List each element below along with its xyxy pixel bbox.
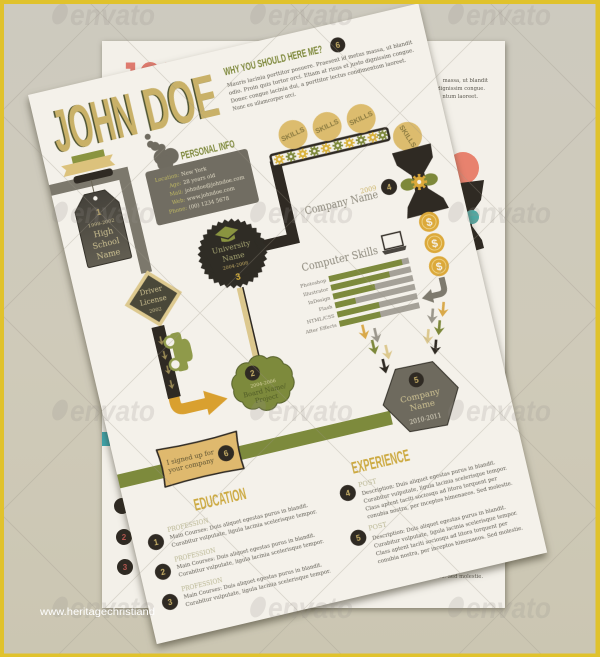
personal info details: New York: [181, 166, 208, 178]
education item 1: Main Courses: Duis aliquet egestas purus in blandit.: [169, 503, 309, 541]
diamond: driver license: License: [139, 294, 167, 308]
skill circles: SKILLS: [397, 124, 417, 149]
watermarks: envato: [70, 197, 155, 230]
small arrows: right stack: [415, 300, 459, 357]
back page number circles: 2: [122, 533, 127, 542]
grey pipe: [50, 173, 147, 290]
title: John Doe: JOHN: [46, 81, 143, 165]
back page footer text: himenaeos. Sed molestie.: [416, 574, 483, 580]
starburst: university: 2004-2008: [222, 260, 249, 272]
cloud: board name: Project: [254, 392, 279, 405]
orange arrow: [174, 386, 230, 422]
hexagon: company name: Company: [399, 387, 441, 406]
watermarks: envato: [268, 592, 353, 625]
coins: $: [430, 238, 439, 251]
starburst: university: 3: [234, 271, 242, 282]
bow tie: [392, 143, 449, 219]
watermarks: [49, 0, 551, 625]
tag: high school: 1: [95, 207, 102, 217]
bar chart: computer skills: [293, 257, 420, 336]
bar chart: computer skills: HTML/CSS: [306, 313, 336, 326]
personal info details: Phone:: [168, 206, 188, 216]
experience item 5: conubia nostra, per inceptos himenaeos. Sed molestie.: [377, 525, 524, 565]
intro paragraph: [227, 40, 419, 113]
education item 2: Main Courses: Duis aliquet egestas purus in blandit.: [176, 533, 316, 571]
personal info details: www.johndoe.com: [186, 186, 235, 203]
experience item 4: 4: [345, 488, 352, 498]
experience item 5: [348, 490, 524, 570]
hexagon: company name: Name: [409, 398, 436, 414]
intro paragraph: Nunc eu ullamcorper orci.: [232, 92, 297, 113]
site credit text: www.heritagechristiand: [39, 606, 155, 618]
callout: signed up: your company: [167, 456, 215, 475]
icon: laptop: [379, 231, 407, 255]
diamond: driver license: 2002: [149, 306, 162, 315]
experience item 4: conubia nostra, per inceptos himenaeos. Sed molestie.: [367, 481, 514, 521]
education item 2: Curabitur vulputate, ligula lacinia scelerisque tempor.: [178, 539, 325, 579]
green band: [117, 411, 393, 488]
back page teal gear: [465, 210, 479, 224]
badge 6 top: 6: [335, 40, 342, 50]
experience item 4: [338, 447, 514, 525]
cloud: board name: 2: [249, 369, 256, 378]
education item 2: [152, 522, 325, 584]
tag: high school: High: [93, 226, 114, 240]
heading: why you should hire me: WHY YOU SHOULD HERE ME?: [223, 44, 324, 78]
black pipe: [236, 160, 293, 248]
personal info box: [145, 148, 260, 226]
diamond: driver license: Driver: [139, 284, 164, 298]
experience item 5: Class aptent taciti sociosqu ad litora torquent per: [375, 521, 509, 558]
education item 1: PROFESSION: [167, 517, 210, 534]
education item 3: PROFESSION: [181, 576, 224, 593]
intro paragraph: odio. Proin quis tortor orci. Etiam at risus et justo dignissim congue.: [228, 48, 415, 97]
hexagon: company name: [376, 356, 466, 438]
intro paragraph: Donec congue lacinia dui, a porttitor lectus condimentum laoreet.: [230, 58, 407, 105]
starburst: university: Name: [221, 250, 246, 264]
personal info details: Location:: [154, 173, 180, 184]
personal info details: Web:: [172, 197, 186, 206]
personal info details: Mail:: [169, 189, 184, 198]
flower gear: [399, 171, 439, 193]
education item 3: 3: [167, 597, 174, 607]
personal info details: (00) 1234 5678: [188, 195, 231, 211]
experience item 4: Class aptent taciti sociosqu ad litora torquent per: [365, 476, 498, 513]
education item 1: [145, 492, 318, 554]
back page number circles: [114, 498, 133, 575]
experience item 5: Curabitur vulputate, ligula lacinia scelerisque tempor.: [374, 510, 518, 550]
computer skills heading: Computer Skills: [300, 244, 379, 274]
education item 2: PROFESSION: [174, 546, 217, 564]
education item 2: 2: [160, 567, 167, 577]
back page title: JOHN: [119, 50, 211, 113]
back page number circles: 3: [123, 563, 128, 572]
starburst: university: University: [211, 238, 252, 256]
callout: signed up: [156, 431, 245, 487]
coins: $: [435, 261, 444, 274]
tag: high school: 1998-2002: [87, 218, 115, 230]
back page teal band: [102, 432, 110, 446]
diamond: driver license: [118, 264, 189, 334]
bar chart: computer skills: After Effects: [304, 323, 338, 336]
company name 2009: Company Name: [303, 188, 379, 218]
icon: car: [163, 330, 196, 373]
education section: [140, 469, 332, 614]
education heading: EDUCATION: [192, 484, 248, 515]
personal info: [136, 112, 260, 226]
skill circles: SKILLS: [349, 110, 374, 127]
skill circles: [276, 92, 425, 179]
skill circles: SKILLS: [315, 118, 340, 135]
watermarks: envato: [70, 592, 155, 625]
experience item 5: 5: [355, 533, 362, 543]
coins: [417, 210, 452, 278]
stick: [237, 287, 261, 362]
dark road with arrows: [151, 325, 181, 399]
education item 3: [159, 551, 332, 614]
tag: high school: Name: [96, 247, 122, 261]
bar chart: computer skills: Illustrator: [303, 286, 330, 298]
company name 2009: 2009: [359, 184, 377, 196]
hexagon: company name: 5: [413, 375, 420, 385]
back page text: [437, 78, 489, 100]
gear bar: [270, 128, 390, 167]
watermarks: envato: [466, 197, 551, 230]
experience item 4: Description: Duis aliquet egestas purus in blandit.: [361, 460, 496, 497]
education item 1: Curabitur vulputate, ligula lacinia scelerisque tempor.: [171, 509, 318, 549]
hexagon: company name: 2010-2011: [409, 412, 442, 426]
watermarks: envato: [466, 395, 551, 428]
bar chart: computer skills: Photoshop: [300, 278, 327, 290]
smoke bubbles: [144, 128, 182, 174]
experience item 4: Curabitur vulputate, ligula lacinia scelerisque tempor.: [363, 465, 508, 505]
back page bow tie: [452, 180, 484, 256]
watermarks: envato: [268, 197, 353, 230]
company name 2009: 4: [386, 182, 393, 192]
experience section: [333, 424, 524, 570]
back page: [102, 41, 505, 608]
ribbon: [60, 147, 117, 186]
cloud: board name: Board Name/: [243, 382, 288, 400]
title: John Doe: DOE: [136, 62, 223, 144]
cloud: board name: [227, 349, 299, 417]
back page text: ntum laoreet.: [442, 94, 478, 100]
education item 3: Main Courses: Duis aliquet egestas purus in blandit.: [183, 562, 323, 601]
back page text: dignissim congue.: [437, 86, 485, 92]
back page text: massa, ut blandit: [443, 78, 489, 84]
education item 1: 1: [153, 538, 160, 547]
experience item 5: Description: Duis aliquet egestas purus in blandit.: [372, 505, 507, 542]
personal info details: [154, 158, 249, 217]
intro paragraph: Mauris lacinia porttitor posuere. Praesent id metus massa, ut blandit: [227, 40, 414, 89]
tag: high school: [69, 175, 132, 268]
watermarks: envato: [268, 395, 353, 428]
personal info details: johndoe@johndoe.com: [183, 174, 245, 195]
personal info heading: PERSONAL INFO: [180, 138, 236, 163]
personal info details: Age:: [168, 181, 182, 190]
badge 6 top: [329, 36, 347, 54]
bar chart: computer skills: Flash: [318, 304, 334, 313]
icon: graduation cap: [214, 224, 240, 244]
callout: signed up: 6: [223, 449, 230, 459]
small arrows: left stack: [358, 320, 396, 376]
callout: signed up: I signed up for: [166, 448, 216, 467]
back page coral skill circle: [447, 152, 479, 184]
experience heading: EXPERIENCE: [350, 446, 411, 478]
watermarks: envato: [70, 395, 155, 428]
watermarks: envato: [466, 592, 551, 625]
title: John Doe: DOE: [137, 62, 224, 144]
grey elbow arrow: [418, 277, 447, 305]
experience item 4: POST: [357, 477, 378, 489]
starburst: university: [191, 211, 275, 296]
tag: high school: School: [92, 236, 121, 251]
cloud: board name: 2004-2006: [250, 378, 277, 390]
bar chart: computer skills: InDesign: [308, 295, 332, 306]
coins: $: [425, 216, 434, 229]
experience item 5: POST: [368, 520, 388, 533]
title: John Doe: JOHN: [44, 81, 141, 166]
personal info details: 28 years old: [183, 173, 217, 186]
education item 3: Curabitur vulputate, ligula lacinia scelerisque tempor.: [185, 568, 332, 608]
skill circles: SKILLS: [280, 126, 306, 143]
